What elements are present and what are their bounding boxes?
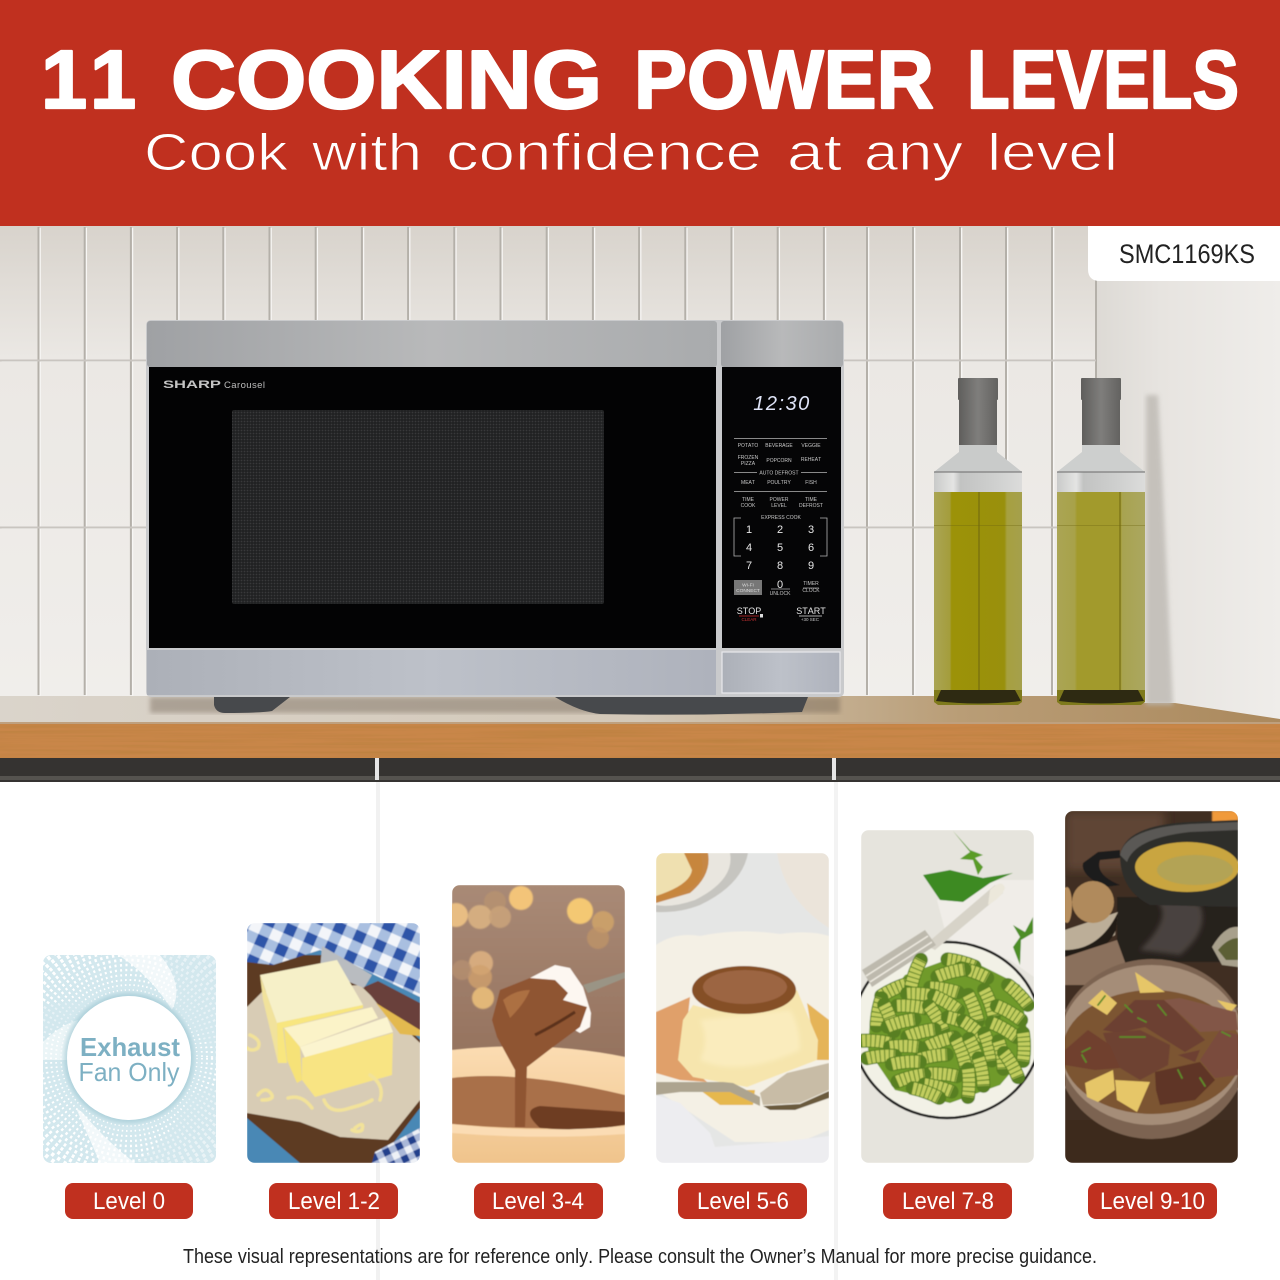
subtitle: with (311, 124, 422, 182)
number keys: 9 (808, 560, 814, 572)
chocolate coating and drip (492, 978, 587, 1127)
keypad labels: COOK (741, 503, 756, 509)
wifi connect button: CONNECT (736, 588, 760, 594)
level pill: 1-2 (269, 1183, 398, 1219)
disclaimer footnote: These visual representations are for reference only. Please consult the Owner’s Manual for more precise guidance. (183, 1246, 1097, 1268)
function keys: CLOCK (802, 588, 820, 594)
microwave shadow (150, 697, 840, 713)
level pill: 1-2: Level 1-2 (288, 1188, 380, 1215)
bowl (452, 1046, 625, 1163)
flan body (678, 990, 818, 1087)
side wall (1097, 226, 1280, 719)
number keys (746, 524, 814, 591)
keypad labels: FROZEN (738, 455, 759, 461)
dark under-counter strip (0, 758, 1280, 782)
number keys: 0 (777, 579, 783, 591)
level pill: 5-6: Level 5-6 (697, 1188, 789, 1215)
main lace plate (656, 931, 829, 1142)
wifi connect button: WI-FI (742, 582, 754, 588)
countertop wood edge (0, 722, 1280, 758)
level pill: 3-4: Level 3-4 (492, 1188, 584, 1215)
number keys: 6 (808, 542, 814, 554)
fan only label: Fan Only (78, 1057, 180, 1087)
beef chunks (1065, 998, 1238, 1105)
white circle (67, 996, 191, 1120)
model tag (1088, 226, 1280, 281)
level pill: 0: Level 0 (93, 1188, 165, 1215)
function keys: STOP (737, 606, 761, 616)
number keys: 4 (746, 542, 752, 554)
fork (862, 883, 1005, 987)
body (146, 320, 844, 697)
keypad labels: AUTO DEFROST (759, 470, 799, 476)
spoon (656, 1063, 829, 1110)
herbs (1082, 996, 1230, 1086)
exhaust label: Exhaust (80, 1032, 180, 1062)
stew plate (1056, 959, 1248, 1139)
dark steam area (1117, 897, 1238, 962)
wood table (1065, 940, 1125, 985)
kitchen scene background (0, 226, 1280, 782)
level pill: 7-8: Level 7-8 (902, 1188, 994, 1215)
function keys: UNLOCK (770, 591, 791, 597)
caramel top (692, 966, 796, 1014)
door window (232, 410, 604, 604)
model tag: SMC1169KS (1119, 239, 1255, 269)
function keys (737, 581, 826, 622)
subtitle: Cook (144, 124, 289, 182)
number keys: 2 (777, 524, 783, 536)
number keys: 5 (777, 542, 783, 554)
fan dot pattern (43, 955, 216, 1163)
bottle shadow on wall (1146, 395, 1173, 705)
subtitle: level (987, 124, 1118, 182)
background flan dish (656, 853, 748, 912)
function keys: CLEAR (741, 617, 757, 622)
keypad labels: EXPRESS COOK (761, 515, 802, 521)
fork (583, 972, 625, 993)
fan shadow ring (64, 993, 194, 1123)
marshmallow (530, 965, 591, 1033)
subtitle: confidence (446, 124, 762, 182)
title: 11 (41, 33, 136, 126)
keypad labels: POTATO (738, 443, 758, 449)
plate (853, 942, 1041, 1118)
keypad labels (734, 438, 827, 556)
card: level 3-4 chocolate marshmallow (444, 885, 625, 1163)
pot soup (1135, 842, 1239, 892)
wooden board (247, 955, 420, 1163)
knife (320, 946, 420, 1036)
level pill: 7-8 (883, 1183, 1012, 1219)
keypad labels: PIZZA (741, 461, 756, 467)
number keys: 8 (777, 560, 783, 572)
butter curls (247, 1035, 381, 1132)
potatoes (1085, 972, 1237, 1112)
header banner (0, 0, 1280, 226)
level pill: 9-10: Level 9-10 (1100, 1188, 1205, 1215)
basil leaves (923, 831, 1033, 965)
title (41, 33, 1239, 126)
parchment (247, 985, 420, 1140)
number keys: 7 (746, 560, 752, 572)
fan swirl bands (43, 955, 216, 1163)
caramel pool (656, 997, 829, 1105)
pasta (862, 955, 1030, 1103)
brand logo: SHARP (163, 379, 221, 391)
bottom silver band (147, 650, 716, 695)
left bottle (934, 378, 1022, 705)
side sauce dish (1212, 927, 1238, 967)
title: POWER (634, 33, 934, 126)
function keys: TIMER (803, 581, 819, 587)
card: level 9-10 beef stew (1056, 811, 1248, 1163)
wifi connect button (734, 580, 762, 595)
cloth corner (372, 1128, 420, 1163)
level pill: 9-10 (1088, 1183, 1217, 1219)
tiled wall (0, 226, 1100, 698)
flan highlight (700, 1010, 800, 1067)
level pill: 0 (65, 1183, 193, 1219)
function keys: START (796, 606, 826, 616)
keypad labels: VEGGIE (801, 443, 821, 449)
control panel (722, 367, 841, 648)
keypad labels: TIME (742, 497, 755, 503)
keypad labels: FISH (805, 480, 817, 486)
keypad labels: REHEAT (801, 457, 821, 463)
level pill: 3-4 (474, 1183, 603, 1219)
number keys: 3 (808, 524, 814, 536)
napkin (937, 880, 1034, 977)
bokeh lights (444, 886, 614, 1009)
keypad labels: DEFROST (799, 503, 823, 509)
checked cloth (247, 923, 420, 997)
feet (214, 697, 808, 715)
subtitle: any (864, 124, 963, 182)
white napkin (656, 1095, 829, 1163)
panel lower button (722, 652, 840, 693)
melted chocolate (452, 1076, 625, 1128)
olive oil bottles (934, 378, 1145, 705)
title: COOKING (171, 33, 602, 126)
keypad labels: BEVERAGE (765, 443, 793, 449)
background lace plate (777, 853, 829, 928)
keypad labels: TIME (805, 497, 818, 503)
right bottle (1057, 378, 1145, 705)
card: level 0 exhaust fan (43, 955, 216, 1163)
keypad labels: POULTRY (767, 480, 791, 486)
keypad labels: POWER (770, 497, 789, 503)
lower white panel (0, 782, 1280, 1280)
keypad labels: MEAT (741, 480, 755, 486)
keypad labels: POPCORN (766, 458, 792, 464)
keypad labels: LEVEL (771, 503, 787, 509)
mushroom basket (1062, 881, 1118, 962)
card: level 7-8 pesto pasta (853, 830, 1041, 1163)
top silver band (147, 321, 717, 367)
card: level 5-6 flan (656, 853, 829, 1163)
black pot (1083, 820, 1239, 907)
microwave (146, 320, 844, 715)
countertop surface (0, 696, 1280, 731)
carousel label: Carousel (224, 380, 265, 391)
function keys: +30 SEC (801, 617, 820, 622)
number keys: 1 (746, 524, 752, 536)
door (149, 367, 716, 648)
back flame (1212, 811, 1238, 823)
subtitle: at (787, 124, 843, 182)
card: level 1-2 butter (247, 923, 420, 1163)
butter block (260, 960, 393, 1097)
clock display: 12:30 (753, 393, 811, 415)
subtitle (144, 124, 1118, 182)
level pill: 5-6 (678, 1183, 807, 1219)
